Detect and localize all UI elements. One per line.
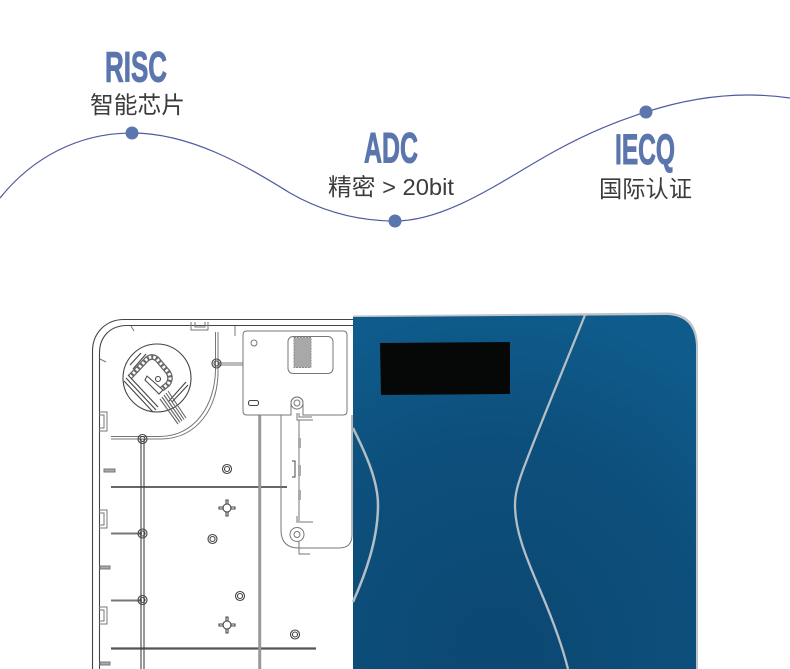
marker: ADC <box>388 214 402 228</box>
lower mount bracket <box>281 413 352 554</box>
scale blue surface <box>353 315 696 669</box>
marker: RISC <box>126 126 138 140</box>
heading: ADC: ADC <box>364 124 418 172</box>
internal traces <box>111 332 316 669</box>
label: international certification: 国际认证 <box>599 176 692 202</box>
wave inlay left <box>353 428 378 602</box>
edge tabs <box>99 322 235 665</box>
heading: RISC: RISC <box>105 44 167 92</box>
blueprint outline <box>92 320 353 669</box>
load sensor in circle <box>123 344 191 424</box>
circuit board module <box>243 331 347 415</box>
scale photo half <box>353 312 698 669</box>
label: smart chip: 智能芯片 <box>90 92 185 118</box>
marker: IECQ <box>640 106 652 118</box>
heading: IECQ: IECQ <box>615 126 675 174</box>
wave inlay centre <box>515 315 585 669</box>
screw mounts <box>138 359 300 639</box>
scale blueprint half <box>92 320 353 669</box>
wave curve <box>0 95 790 221</box>
scale glass edge <box>353 312 698 669</box>
cross mounts <box>219 500 235 633</box>
display window <box>380 342 510 395</box>
label: precision: 精密 > 20bit <box>328 174 454 200</box>
